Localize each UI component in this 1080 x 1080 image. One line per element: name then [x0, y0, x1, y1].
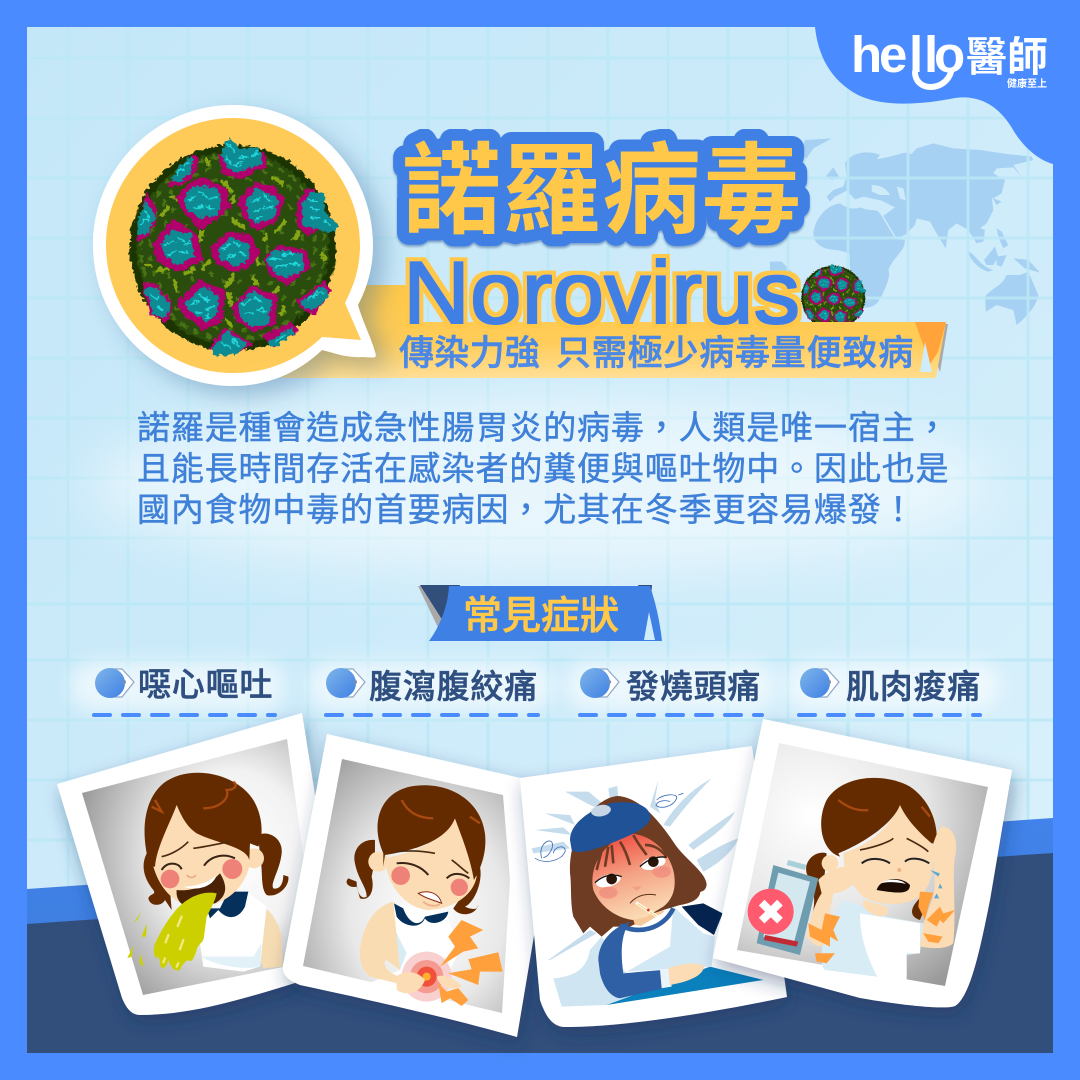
symptom: 發燒頭痛: 發燒頭痛 — [626, 668, 761, 705]
subtitle: 傳染力強 — [399, 334, 540, 373]
girl vomiting — [127, 773, 288, 972]
logo: hello 醫師: 醫師 — [966, 34, 1048, 80]
logo: hello 醫師 — [851, 26, 1048, 90]
symptom: 腹瀉腹絞痛: 腹瀉腹絞痛 — [369, 668, 538, 705]
vomit — [127, 893, 217, 971]
ice pack — [570, 802, 651, 852]
photo 2: diarrhea and abdominal cramps — [283, 734, 540, 1037]
icon: red cross — [748, 889, 794, 935]
symptom: 腹瀉腹絞痛 — [326, 668, 538, 715]
pain mark — [402, 952, 452, 1002]
body text panel: 諾羅是種會造成急性腸胃炎的病毒，人類是唯一宿主， — [137, 409, 949, 446]
symptom: 噁心嘔吐 — [94, 666, 275, 715]
girl in bed with fever — [532, 778, 763, 1007]
icon: low battery — [757, 860, 818, 955]
body text panel — [90, 400, 990, 570]
photo 1: nausea and vomiting — [57, 713, 330, 1015]
photo 4: muscle soreness — [713, 719, 1012, 1007]
body text panel: 且能長時間存活在感染者的糞便與嘔吐物中。因此也是 — [137, 450, 949, 487]
icon: small virus — [800, 264, 866, 322]
world map — [770, 138, 1040, 325]
right arm and hand — [920, 826, 956, 948]
shirt — [623, 908, 717, 972]
ribbon fold — [915, 322, 946, 364]
symptom: 噁心嘔吐: 噁心嘔吐 — [138, 666, 273, 703]
ribbon: subtitle banner — [280, 285, 948, 378]
girl with stomach ache — [347, 785, 503, 1006]
title: Norovirus: Norovirus — [403, 243, 800, 342]
left fist and arm — [807, 866, 860, 946]
title: 諾羅病毒: 諾羅病毒 — [402, 135, 802, 246]
symptom: 肌肉痠痛: 肌肉痠痛 — [846, 668, 981, 705]
heading ribbon: 常見症狀 — [418, 585, 662, 641]
heading ribbon: 常見症狀: 常見症狀 — [463, 595, 619, 638]
symptom labels — [70, 662, 1000, 715]
logo: hello 醫師: 健康至上 — [1007, 77, 1047, 90]
logo corner shape — [815, 27, 1053, 164]
dizzy swirls — [535, 793, 683, 861]
symptom: 肌肉痠痛 — [799, 668, 981, 715]
icon: speech bubble with norovirus — [93, 105, 376, 386]
body text panel: 國內食物中毒的首要病因，尤其在冬季更容易爆發！ — [137, 491, 916, 528]
photo 3: fever and headache — [520, 746, 787, 1027]
logo: hello 醫師: hello — [851, 26, 965, 83]
subtitle: 只需極少病毒量便致病 — [556, 334, 914, 373]
pain bolts — [808, 892, 955, 963]
virus illustration — [128, 136, 338, 354]
symptom: 發燒頭痛 — [580, 668, 762, 715]
girl crying with arm pain — [748, 778, 956, 982]
floor: blue band and navy base — [27, 818, 1053, 1053]
